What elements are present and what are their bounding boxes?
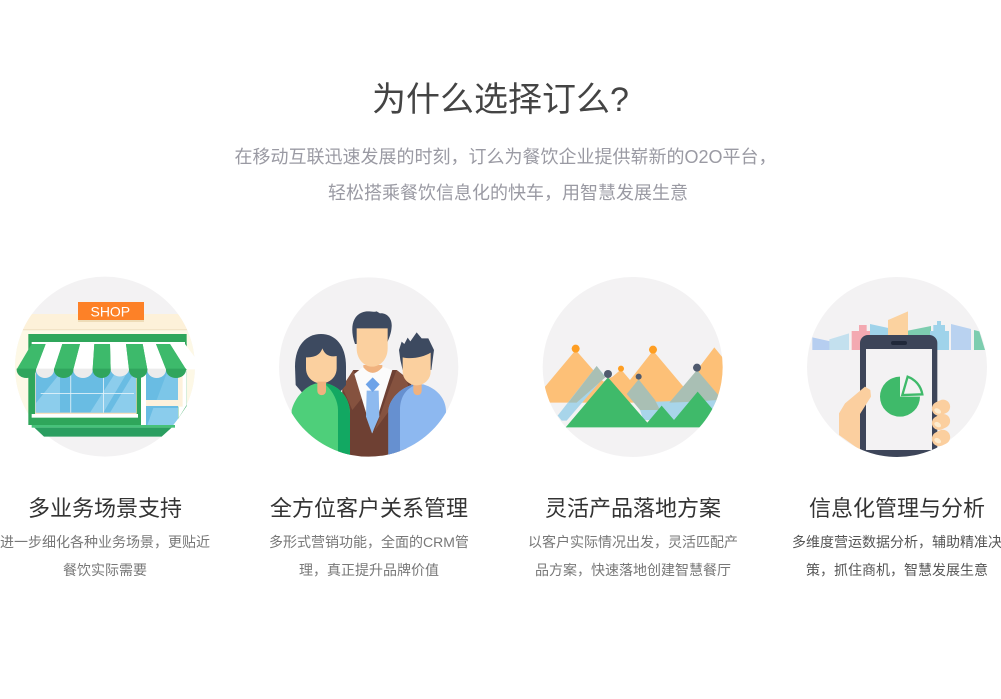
feature 1 description: 进一步细化各种业务场景，更贴近 bbox=[0, 534, 210, 550]
feature 2 heading: 全方位客户关系管理 bbox=[270, 496, 468, 521]
feature 3 description: 以客户实际情况出发，灵活匹配产 bbox=[528, 534, 738, 550]
icon: phone with pie chart bbox=[807, 277, 987, 468]
illustrations bbox=[15, 276, 987, 457]
feature 4 description: 策，抓住商机，智慧发展生意 bbox=[806, 562, 988, 578]
feature 4 description bbox=[792, 534, 1001, 578]
icon: three people bbox=[279, 277, 458, 470]
feature 1 heading: 多业务场景支持 bbox=[28, 496, 182, 521]
awning bbox=[17, 344, 195, 378]
feature 2 description: 多形式营销功能，全面的CRM管 bbox=[269, 534, 469, 550]
subtitle text block bbox=[234, 147, 776, 203]
feature 3 description bbox=[528, 534, 738, 578]
feature 3 heading: 灵活产品落地方案 bbox=[545, 496, 721, 521]
feature 1 description: 餐饮实际需要 bbox=[63, 562, 147, 578]
title: 为什么选择订么? bbox=[372, 81, 629, 119]
feature 4 description: 多维度营运数据分析，辅助精准决 bbox=[792, 534, 1001, 550]
feature 3 description: 品方案，快速落地创建智慧餐厅 bbox=[535, 562, 731, 578]
icon: mountains bbox=[540, 277, 730, 457]
feature 1 description bbox=[0, 534, 210, 578]
icon: shop storefront bbox=[15, 277, 195, 457]
subtitle text block: 轻松搭乘餐饮信息化的快车，用智慧发展生意 bbox=[328, 183, 688, 203]
shop sign text: SHOP bbox=[91, 304, 130, 320]
feature 2 description bbox=[269, 534, 469, 578]
feature 2 description: 理，真正提升品牌价值 bbox=[299, 562, 439, 578]
subtitle text block: 在移动互联迅速发展的时刻，订么为餐饮企业提供崭新的O2O平台， bbox=[234, 147, 776, 167]
feature 4 heading: 信息化管理与分析 bbox=[809, 496, 985, 521]
